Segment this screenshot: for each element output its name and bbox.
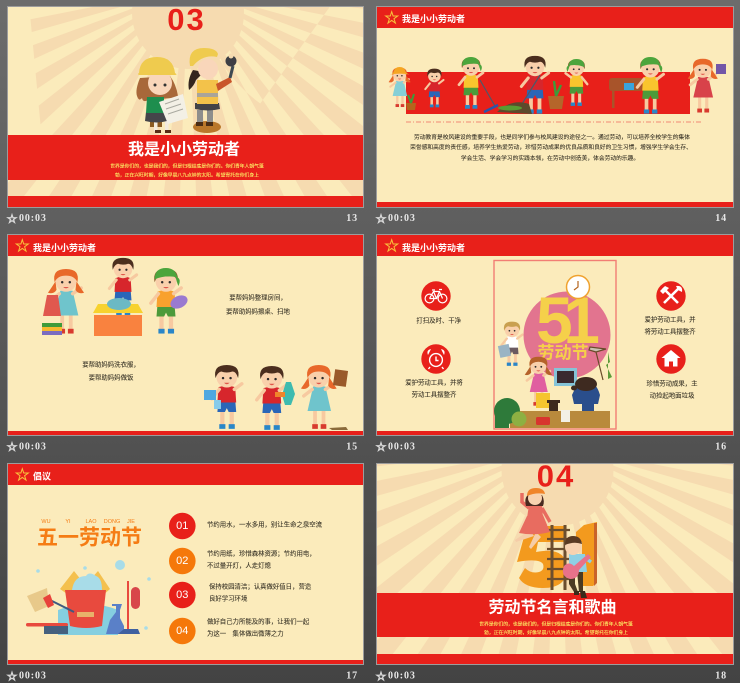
text block lower: 要帮助妈妈洗衣服， [82,360,140,368]
bottom bar [377,431,733,435]
sunburst background [377,464,733,654]
list item 02: 节约用纸，珍惜森林资源；节约用电， [207,548,316,558]
bottom bar [8,431,363,435]
title band [377,593,733,637]
pinyin heading: DONG [104,519,120,525]
illustration: children folding clothes and cooking [42,257,190,336]
bottom bar [8,196,363,207]
illustration: girl with blueprint [136,57,188,133]
text block lower: 要帮助妈妈做饭 [89,372,134,382]
footer: slide 15 timing: 00:03 [19,442,47,452]
body text: 劳动教育是校风建设的重要手段，也是同学们参与校风建设的途径之一。通过劳动，可以培养全校学生的集体 [414,133,690,141]
list item 02: 不过量开灯，人走灯熄 [207,560,272,570]
bottom bar [8,660,363,664]
illustration: cleaning bucket and tools [26,560,151,635]
footer: slide 16 timing: 16 [715,442,727,452]
text block upper: 要帮助妈妈擦桌、扫地 [226,306,291,316]
footer: slide 15 timing [8,442,358,452]
panel: slide 13 section cover [8,0,363,207]
body text [410,133,692,162]
title band: 劳动节名言和歌曲 [488,598,617,616]
title band: 我是小小劳动者 [128,140,240,158]
footer: slide 18 timing [377,670,727,682]
clock [566,276,590,298]
header bar [8,235,363,256]
list item 04 [169,616,310,644]
title band: 勃，正在兴旺时期，好像早晨八九点钟的太阳。希望寄托在你们身上 [115,172,259,178]
caption: right one [644,314,696,336]
panel: slide 14 [377,7,733,207]
icon: alarm clock [421,344,451,374]
title band: 世界是你们的，也是我们的，但是归根结底是你们的。你们青年人朝气蓬 [479,620,633,628]
header bar: 倡议 [33,470,51,482]
list item 04: 为这一 集体做出微薄之力 [207,628,284,638]
illustration: children washing and tidying [204,364,348,430]
footer: slide 17 timing: 00:03 [19,670,47,682]
pinyin heading: JIE [127,519,135,525]
title band: 世界是你们的，也是我们的，但是归根结底是你们的。你们青年人朝气蓬 [110,162,264,170]
footer: slide 14 timing [377,213,727,224]
header bar [377,235,733,256]
list item 04: 做好自己力所能及的事，让我们一起 [207,616,310,626]
caption: left two: 劳动工具摆整齐 [412,390,457,398]
list item 02 [169,548,316,574]
list item 03: 03 [176,589,188,601]
footer: slide 16 timing [377,442,727,452]
title band: 勃，正在兴旺时期，好像早晨八九点钟的太阳。希望寄托在你们身上 [484,629,628,636]
poster children and objects [494,321,612,428]
icon: crossed tools [656,281,686,311]
bottom bar [377,654,733,664]
footer: slide 13 timing: 00:03 [19,213,47,224]
pinyin heading: WU [41,519,51,525]
panel: slide 17 [8,464,363,664]
list item 03 [169,582,312,608]
illustration: orange 51 with ladder, girl and guitarist [515,488,597,592]
list item 01 [169,513,323,539]
footer: slide 18 timing: 18 [715,670,727,682]
list item 03: 良好学习环境 [209,594,248,602]
text block lower [82,360,140,382]
header bar: 我是小小劳动者 [33,242,96,253]
caption: right two: 珍惜劳动成果，主 [646,378,698,388]
text block upper: 要帮妈妈整理房间， [229,292,287,302]
panel: slide 18 section cover [377,464,733,664]
icon: house [656,344,686,374]
list item 02: 02 [176,555,188,567]
caption: right one: 将劳动工具摆整齐 [644,326,696,336]
dashed divider [406,121,703,123]
caption: left two: 爱护劳动工具，并将 [405,378,463,386]
big number 51: 51 [536,283,598,357]
panel: slide 16 [377,235,733,435]
footer: slide 17 timing: 17 [346,670,358,682]
bottom bar [377,202,733,207]
body text: 荣誉感和高度的责任感，培养学生热爱劳动，珍惜劳动成果的优良品质和良好的卫生习惯，增强学生学会生存、 [410,143,692,151]
list item 01: 节约用水，一水多用，别让生命之泉空流 [207,520,323,528]
footer: slide 14 timing: 14 [715,213,727,224]
header bar [377,7,733,28]
guitarist shoes over band [574,591,587,598]
illustration: boy worker with wrench [188,48,236,133]
section number 04: 04 [537,458,575,494]
caption: right two: 动捡起地面垃圾 [650,390,695,400]
list item 03: 保持校园清洁；认真做好值日，营造 [209,582,312,590]
red illustration band [406,72,690,114]
icon: bicycle [421,281,451,311]
footer: slide 15 timing: 15 [346,442,358,452]
heading: labour day: 五一劳动节 [37,526,142,550]
sunburst background [8,0,363,207]
caption: right two [646,378,698,400]
footer: slide 13 timing [8,213,358,224]
pinyin heading [41,519,135,525]
poster title: 劳动节 [538,342,588,362]
poster: 51 labour day [494,260,616,429]
body text: 学会生活、学会学习的实践本领，在劳动中创造美，体会劳动的乐趣。 [461,154,639,162]
section number 03: 03 [167,2,206,37]
header bar [8,464,363,485]
footer: slide 16 timing: 00:03 [388,442,416,452]
text block upper [226,292,291,316]
footer: slide 17 timing [8,670,358,682]
illustration: children doing chores [389,55,726,114]
footer: slide 18 timing: 00:03 [388,670,416,682]
pinyin heading: LAO [85,519,97,525]
list item 04: 04 [176,625,188,637]
header bar: 我是小小劳动者 [402,242,465,253]
caption: left two [405,378,463,398]
caption: left one: 打扫及时、干净 [416,316,462,324]
caption: right one: 爱护劳动工具，并 [644,314,696,324]
footer: slide 14 timing: 00:03 [388,213,416,224]
pinyin heading: YI [65,519,71,525]
panel: slide 15 [8,235,363,435]
header bar: 我是小小劳动者 [402,13,465,24]
title band [8,135,363,180]
list item 01: 01 [176,520,188,532]
footer: slide 13 timing: 13 [346,213,358,224]
